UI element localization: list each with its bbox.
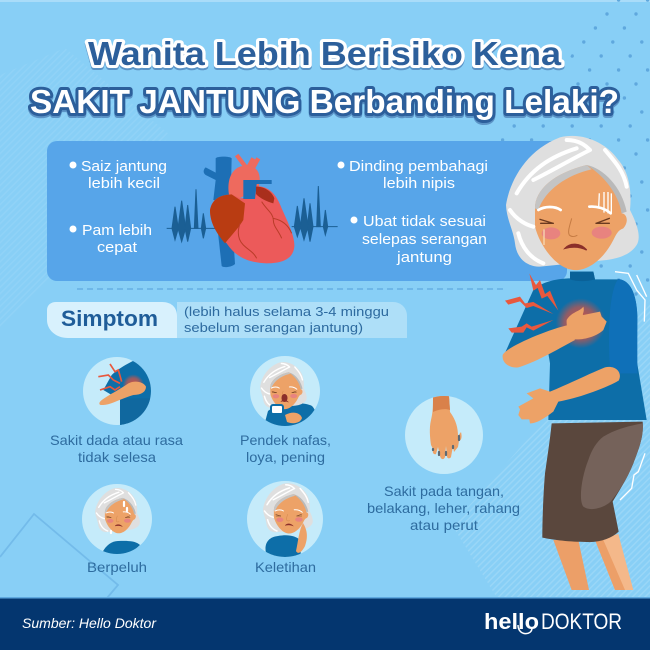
fact: saiz jantung [70, 159, 167, 192]
illustration: elderly woman with chest pain [503, 136, 647, 590]
label: Sakit pada tangan, [384, 483, 504, 499]
fact: ubat tidak sesuai: jantung [396, 250, 452, 266]
simptom note: (lebih halus selama 3-4 minggu [184, 304, 389, 319]
symptom: fatigue [247, 481, 323, 575]
fact: pam lebih cepat [70, 223, 152, 256]
heading: Simptom [47, 302, 407, 338]
fact: saiz jantung: Saiz jantung [81, 159, 167, 175]
label: Berpeluh [87, 559, 147, 575]
fact: ubat tidak sesuai: selepas serangan [362, 232, 487, 248]
label: loya, pening [246, 449, 325, 465]
fact: saiz jantung: lebih kecil [88, 176, 160, 192]
tear and stress lines [599, 192, 611, 213]
heading: Simptom: Simptom [61, 306, 158, 331]
symptom: shortness of breath [240, 356, 331, 465]
fact: dinding pembahagi: Dinding pembahagi [349, 159, 488, 175]
fact: pam lebih cepat: Pam lebih [82, 223, 152, 239]
source: Sumber: Hello Doktor [22, 616, 157, 631]
logo: DOKTOR [541, 609, 622, 634]
icon: sweating woman [82, 484, 152, 556]
dot pattern [490, 0, 650, 300]
shake lines [615, 272, 647, 322]
title [30, 35, 619, 120]
lower arm and hand [518, 367, 620, 423]
arm on chest [503, 325, 575, 367]
legs and skirt [542, 422, 645, 590]
title line 2: SAKIT JANTUNG Berbanding Lelaki? [30, 83, 619, 120]
label: Keletihan [255, 559, 316, 575]
logo: hello [484, 609, 539, 634]
label: belakang, leher, rahang [367, 500, 520, 516]
icon: tired woman [247, 481, 323, 558]
icon: breathless woman [250, 356, 320, 430]
logo [484, 609, 622, 634]
fact: ubat tidak sesuai [350, 214, 487, 266]
fact: pam lebih cepat: cepat [97, 240, 137, 256]
label: Sakit dada atau rasa [50, 432, 183, 448]
hatched background top left [0, 48, 170, 330]
symptom: chest pain [50, 357, 183, 465]
ECG wave left [167, 189, 215, 242]
hatched background bottom right [452, 300, 650, 598]
triangle outline decoration [0, 514, 118, 598]
footer [0, 597, 650, 650]
label [240, 432, 331, 465]
ECG wave right [292, 186, 338, 242]
icon: hand [405, 396, 483, 474]
label: atau perut [410, 517, 478, 533]
torso and head [503, 136, 647, 420]
chest glow [556, 298, 606, 348]
pain bolts [505, 273, 558, 333]
label: tidak selesa [78, 449, 156, 465]
fact: ubat tidak sesuai: Ubat tidak sesuai [363, 214, 486, 230]
title line 1: Wanita Lebih Berisiko Kena [88, 35, 562, 72]
symptom: sweating [82, 484, 152, 575]
fact: dinding pembahagi: lebih nipis [383, 176, 455, 192]
simptom note [184, 304, 389, 335]
icon: heart with ECG waves [167, 155, 338, 267]
fact: dinding pembahagi [338, 159, 488, 192]
simptom note: sebelum serangan jantung) [184, 320, 363, 335]
symptom: referred pain [367, 396, 520, 533]
panel: heart facts [47, 141, 567, 281]
icon: chest pain [83, 357, 151, 425]
divider [77, 288, 505, 290]
label: Pendek nafas, [240, 432, 331, 448]
label [367, 483, 520, 533]
label [50, 432, 183, 465]
